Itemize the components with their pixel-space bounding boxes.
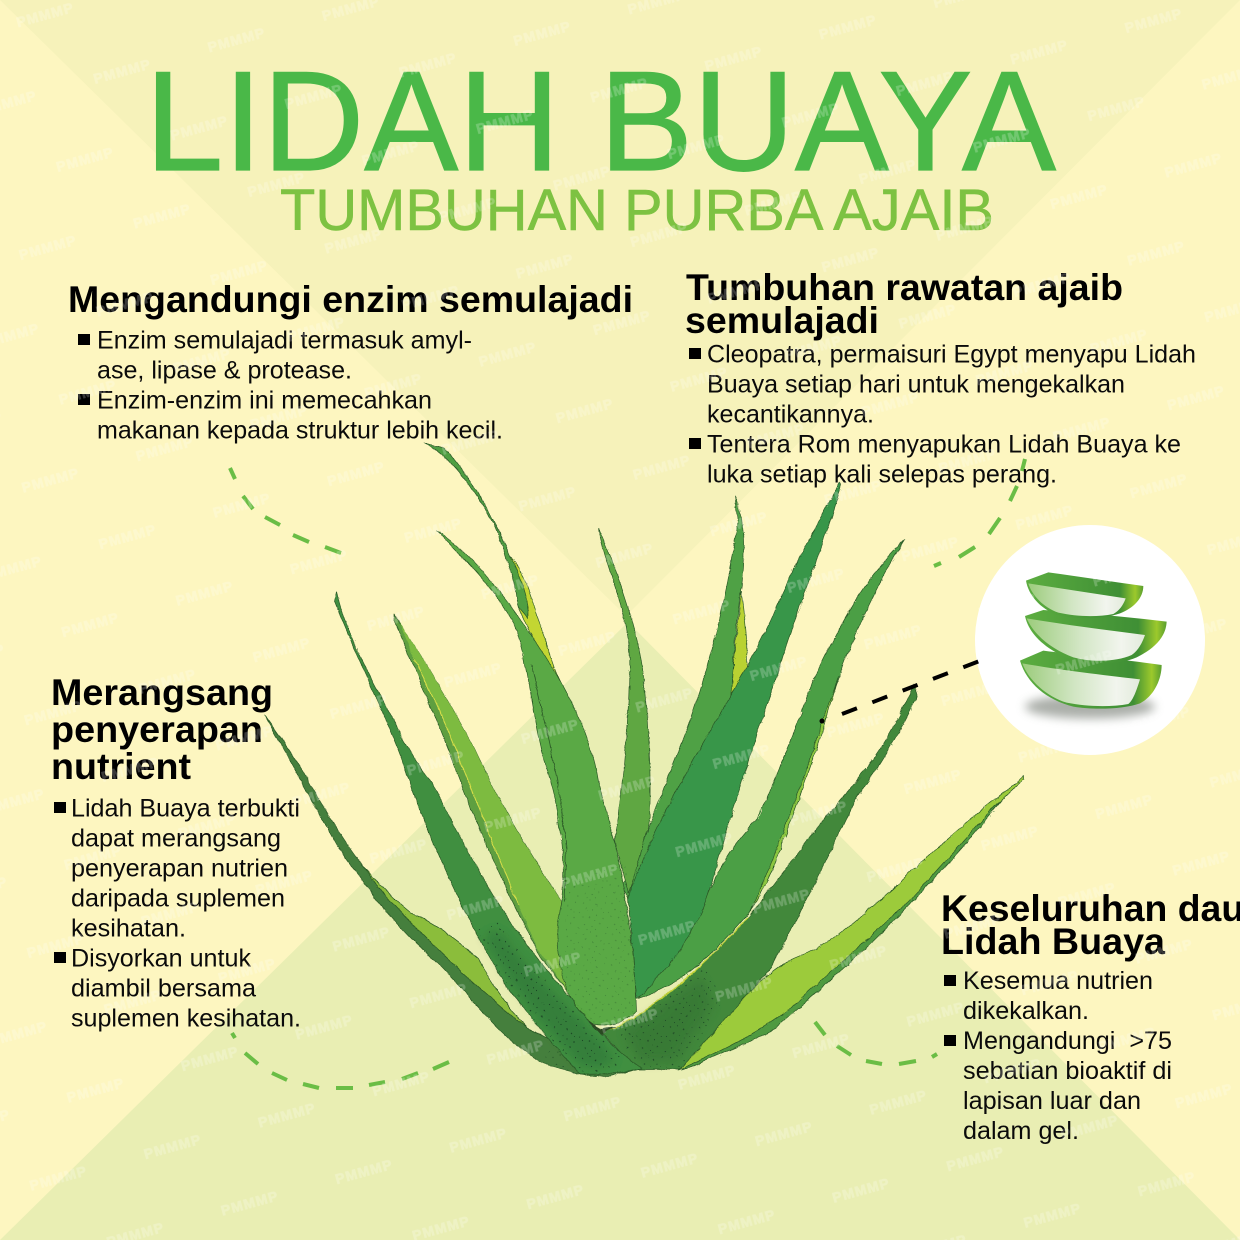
text block: whole leaf <box>944 967 1172 1145</box>
aloe vera plant illustration <box>263 442 1023 1075</box>
panel: miracle care <box>685 267 1196 488</box>
text block: nutrient absorption: kesihatan. <box>71 914 186 942</box>
text block: enzymes: Enzim semulajadi termasuk amyl- <box>97 326 472 354</box>
text block: miracle care: kecantikannya. <box>707 400 874 428</box>
heading: enzymes: Mengandungi enzim semulajadi <box>68 279 633 320</box>
text block: nutrient absorption: diambil bersama <box>71 974 256 1002</box>
dashed connector: bottom right <box>815 1022 937 1064</box>
text block: nutrient absorption: penyerapan nutrien <box>71 854 288 882</box>
text block: miracle care: Tentera Rom menyapukan Lidah Buaya ke <box>707 430 1181 458</box>
leaf: dark right <box>600 683 916 1068</box>
heading: nutrient absorption: nutrient <box>51 746 191 787</box>
text block: enzymes <box>78 326 503 444</box>
panel: enzymes <box>68 279 633 444</box>
text block: whole leaf: lapisan luar dan <box>963 1087 1141 1115</box>
leaf: right with lime strip <box>637 539 903 997</box>
dashed connector: bottom left <box>232 1033 449 1088</box>
subtitle: TUMBUHAN PURBA AJAIB <box>280 178 994 243</box>
text block: nutrient absorption: suplemen kesihatan. <box>71 1004 301 1032</box>
panel: whole leaf <box>941 888 1240 1145</box>
text block: nutrient absorption <box>54 794 301 1032</box>
text block: miracle care: luka setiap kali selepas perang. <box>707 460 1057 488</box>
heading: miracle care: Tumbuhan rawatan ajaib <box>686 267 1123 308</box>
text block: enzymes: ase, lipase & protease. <box>97 356 352 384</box>
text block: enzymes: makanan kepada struktur lebih kecil. <box>97 416 503 444</box>
leaf: lime far right <box>677 775 1023 1069</box>
leaf: bright green centre right <box>627 482 840 997</box>
text block: whole leaf: dikekalkan. <box>963 997 1089 1025</box>
leaf: lime lower band shadow <box>680 800 1000 1069</box>
leaf: long dark left <box>263 713 637 1075</box>
heading: nutrient absorption <box>51 672 273 787</box>
text block: miracle care <box>689 340 1196 488</box>
heading: nutrient absorption: penyerapan <box>51 709 263 750</box>
panel: nutrient absorption <box>51 672 301 1032</box>
dashed pointer to slices <box>820 660 982 724</box>
text block: whole leaf: sebatian bioaktif di <box>963 1057 1172 1085</box>
text block: nutrient absorption: Lidah Buaya terbukti <box>71 794 300 822</box>
text block: whole leaf: dalam gel. <box>963 1117 1079 1145</box>
dashed connector: top left <box>230 468 341 553</box>
leaf: tall back left <box>423 442 575 713</box>
title: LIDAH BUAYA <box>145 42 1056 201</box>
dashed connector: top right <box>934 459 1025 566</box>
slices circle <box>975 525 1205 755</box>
heading: whole leaf: Lidah Buaya <box>941 921 1165 962</box>
text block: miracle care: Cleopatra, permaisuri Egypt menyapu Lidah <box>707 340 1196 368</box>
aloe slices stack <box>1020 572 1167 719</box>
text block: nutrient absorption: daripada suplemen <box>71 884 285 912</box>
text block: nutrient absorption: dapat merangsang <box>71 824 281 852</box>
heading: nutrient absorption: Merangsang <box>51 672 273 713</box>
heading: miracle care: semulajadi <box>685 300 879 341</box>
heading: whole leaf <box>941 888 1240 962</box>
leaf: dark left front <box>333 590 640 1073</box>
text block: whole leaf: Mengandungi >75 <box>963 1027 1172 1055</box>
leaf: light green left <box>393 613 567 990</box>
text block: nutrient absorption: Disyorkan untuk <box>71 944 252 972</box>
leaf: thin centre <box>597 527 649 893</box>
leaf: centre front <box>435 529 635 1027</box>
text block: whole leaf: Kesemua nutrien <box>963 967 1153 995</box>
text block: enzymes: Enzim-enzim ini memecahkan <box>97 386 432 414</box>
leaf base shadow <box>587 1018 615 1034</box>
text block: miracle care: Buaya setiap hari untuk mengekalkan <box>707 370 1125 398</box>
leaf: right thin with yellow patch <box>620 495 746 897</box>
heading: miracle care <box>685 267 1123 341</box>
